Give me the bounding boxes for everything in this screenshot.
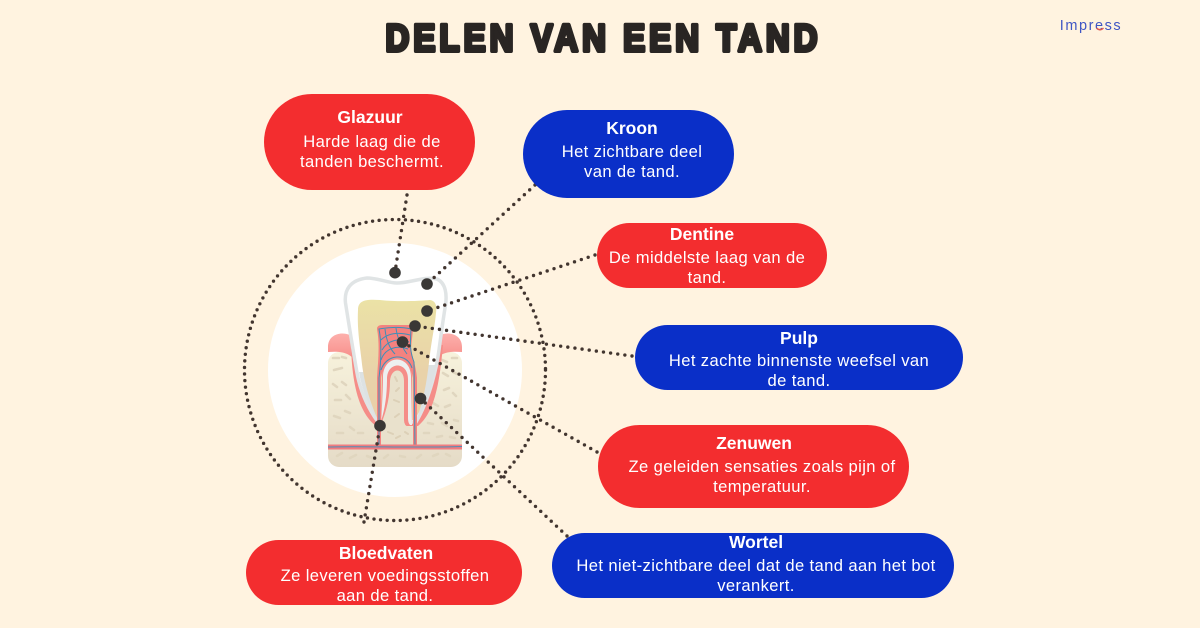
callout: Dentine: Dentine: [670, 224, 734, 244]
logo: Impress: Impress: [1060, 18, 1122, 34]
callout: Zenuwen: Zenuwen: [716, 433, 792, 453]
blood vessel band: [328, 444, 462, 450]
callout: Dentine: tand.: [688, 268, 726, 287]
pink outer arch: [381, 357, 412, 425]
callout: Glazuur: Harde laag die de: [303, 132, 441, 151]
callout: Bloedvaten: aan de tand.: [337, 586, 433, 605]
inner bone: [381, 370, 413, 445]
enamel shading: [359, 365, 436, 420]
pulp chamber and canals: [377, 325, 417, 447]
connector: Zenuwen: [402, 342, 597, 452]
connector: Dentine: [427, 255, 595, 311]
connector: Kroon: [427, 185, 535, 284]
callout: Glazuur: [264, 94, 475, 190]
bone texture: [333, 357, 458, 458]
callout: Wortel: verankert.: [717, 576, 795, 595]
pulp nerves: [379, 328, 415, 447]
callout: Kroon: [523, 110, 734, 198]
inner pink arch: [380, 366, 412, 426]
callout: Glazuur: Glazuur: [337, 107, 403, 127]
dentine: [358, 300, 436, 420]
periodontal pink layer: [351, 345, 443, 426]
callout: Zenuwen: temperatuur.: [713, 477, 811, 496]
right gum: [433, 334, 462, 362]
callout: Wortel: [552, 532, 954, 598]
tooth illustration: [328, 278, 462, 467]
marker dots: [374, 267, 433, 432]
callout: Wortel: Wortel: [729, 532, 783, 552]
connector: Pulp: [415, 326, 632, 356]
callout: Pulp: Pulp: [780, 328, 818, 348]
white arch: [381, 360, 412, 425]
callout: Pulp: Het zachte binnenste weefsel van: [669, 351, 929, 370]
enamel: [345, 278, 446, 422]
bone block: [328, 352, 462, 467]
callout: Kroon: van de tand.: [584, 162, 680, 181]
callout: Zenuwen: [598, 425, 909, 508]
left gum: [328, 334, 357, 362]
connector: Wortel: [420, 398, 567, 536]
callout: Bloedvaten: Ze leveren voedingsstoffen: [281, 566, 489, 585]
callout: Dentine: De middelste laag van de: [609, 248, 805, 267]
callout: Pulp: [635, 325, 963, 390]
callout: Kroon: Het zichtbare deel: [562, 142, 702, 161]
title: DELEN VAN EEN TAND: [386, 17, 818, 60]
callout: Zenuwen: Ze geleiden sensaties zoals pijn of: [629, 457, 895, 476]
callout: Wortel: Het niet-zichtbare deel dat de tand aan het bot: [576, 556, 936, 575]
callout: Glazuur: tanden beschermt.: [300, 152, 444, 171]
white circle behind tooth: [268, 243, 522, 497]
callout: Bloedvaten: Bloedvaten: [339, 543, 433, 563]
dotted circle: [244, 220, 546, 520]
connector: Glazuur: [395, 195, 407, 272]
connector: Bloedvaten: [364, 426, 380, 522]
inner bone texture: [388, 377, 408, 438]
callout: Dentine: [597, 223, 827, 288]
callout: Kroon: Kroon: [606, 118, 658, 138]
callout: Pulp: de tand.: [767, 371, 831, 390]
callout: Bloedvaten: [246, 540, 522, 605]
